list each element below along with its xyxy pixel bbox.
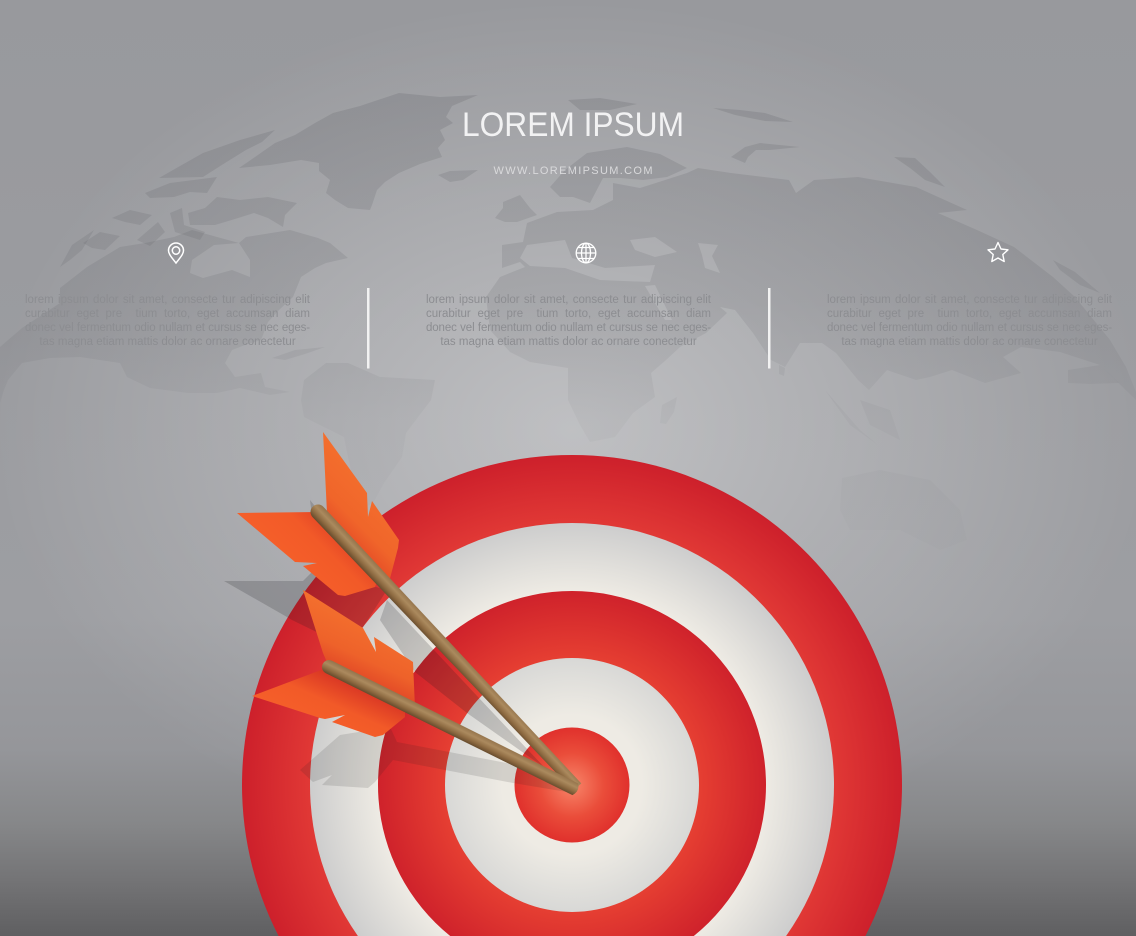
text column 2: donec vel fermentum odio nullam et cursus se nec eges- [426, 322, 711, 334]
world map [0, 93, 1136, 550]
text column 3: lorem ipsum dolor sit amet, consecte tur adipiscing elit [827, 294, 1112, 306]
text column 3: tas magna etiam mattis dolor ac ornare conectetur [841, 336, 1098, 348]
icon: star [988, 242, 1008, 262]
arrow 1 [237, 432, 583, 792]
fletching upper [303, 590, 415, 708]
outer red ring [242, 455, 902, 936]
text column 2: curabitur eget pre tium torto, eget accumsan diam [426, 308, 711, 320]
text column 3: donec vel fermentum odio nullam et cursus se nec eges- [827, 322, 1112, 334]
fletching lower [252, 667, 405, 737]
shaft [320, 658, 581, 797]
text column 3: curabitur eget pre tium torto, eget accumsan diam [827, 308, 1112, 320]
arrow shadows [224, 500, 573, 793]
text column 2 [426, 294, 711, 348]
fletching lower [237, 512, 379, 596]
inner red ring [378, 591, 766, 936]
text column 2: tas magna etiam mattis dolor ac ornare conectetur [440, 336, 697, 348]
text column 1: tas magna etiam mattis dolor ac ornare conectetur [39, 336, 296, 348]
target [242, 455, 902, 936]
text column 1: lorem ipsum dolor sit amet, consecte tur adipiscing elit [25, 294, 310, 306]
divider right [768, 288, 770, 368]
text column 1 [25, 294, 310, 348]
icon: globe [576, 243, 596, 263]
inner white ring [445, 658, 699, 912]
text column 3 [827, 294, 1112, 348]
outer white ring [310, 523, 834, 936]
title: LOREM IPSUM [462, 106, 684, 144]
bullseye [514, 728, 630, 842]
shaft [307, 501, 583, 792]
icon: location pin [168, 243, 184, 263]
divider left [367, 288, 370, 368]
text column 1: curabitur eget pre tium torto, eget accumsan diam [25, 308, 310, 320]
fletching upper [318, 432, 399, 586]
arrow 2 [252, 590, 581, 797]
text column 2: lorem ipsum dolor sit amet, consecte tur adipiscing elit [426, 294, 711, 306]
text column 1: donec vel fermentum odio nullam et cursus se nec eges- [25, 322, 310, 334]
website url: WWW.LOREMIPSUM.COM [494, 165, 652, 177]
